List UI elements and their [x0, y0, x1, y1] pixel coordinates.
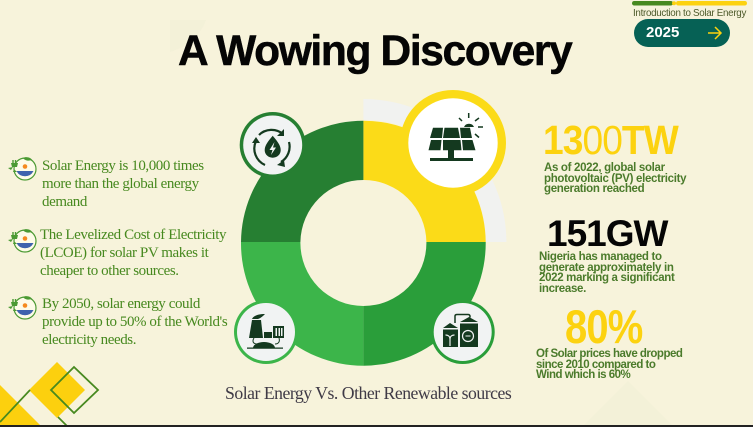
stat text 1: As of 2022, global solar	[544, 162, 665, 174]
fact 3	[42, 296, 228, 348]
fact 2	[40, 227, 226, 279]
stat text 1: photovoltaic (PV) electricity	[544, 173, 686, 185]
bottom edge	[0, 425, 753, 427]
stat text 3	[536, 348, 682, 381]
fact 2: (LCOE) for solar PV makes it	[40, 245, 208, 261]
bullet 1	[8, 157, 36, 180]
icon: water cycle	[240, 112, 306, 178]
fact 2: cheaper to other sources.	[40, 263, 179, 279]
title: A Wowing Discovery	[178, 28, 571, 75]
stat text 3: since 2010 compared to	[536, 359, 655, 371]
stat: 151GW: 151GW	[547, 213, 667, 254]
fact 3: provide up to 50% of the World's	[42, 314, 227, 330]
icon: power plant	[234, 300, 298, 364]
year badge	[634, 19, 730, 47]
decorative corner diamonds	[0, 362, 98, 426]
stat text 1	[544, 162, 686, 195]
fact 1: Solar Energy is 10,000 times	[42, 158, 204, 174]
progress bar	[632, 1, 747, 6]
fact 1	[42, 158, 204, 210]
gray background arc	[363, 99, 506, 242]
segment: bio	[363, 242, 486, 366]
stat text 2: 2022 marking a significant	[539, 272, 674, 284]
icon: solar panel	[400, 90, 506, 196]
stat text 2: increase.	[539, 283, 586, 295]
stat text 2: Nigeria has managed to	[539, 251, 662, 263]
subtitle label: Introduction to Solar Energy	[633, 8, 746, 19]
stat text 2: generate approximately in	[539, 262, 674, 274]
stat text 3: Of Solar prices have dropped	[536, 348, 682, 360]
fact 3: electricity needs.	[42, 332, 136, 348]
stat: 80%: 80%	[565, 300, 642, 353]
chart caption: Solar Energy Vs. Other Renewable sources	[225, 383, 511, 403]
stat text 1: generation reached	[544, 183, 644, 195]
year badge: 2025	[646, 24, 679, 41]
stat text 2	[539, 251, 675, 295]
stat text 3: Wind which is 60%	[536, 369, 630, 381]
bullet 3	[8, 296, 36, 319]
segment: solar	[363, 121, 486, 242]
icon: arrow	[708, 26, 722, 40]
icon: biogas	[431, 300, 495, 364]
stat: 1300TW: 1300TW	[543, 117, 678, 163]
fact 3: By 2050, solar energy could	[42, 296, 200, 312]
bullet 2	[8, 229, 36, 252]
segment: hydro	[241, 121, 363, 242]
fact 1: demand	[42, 194, 87, 210]
segment: geothermal	[241, 242, 363, 366]
bullet icons	[8, 157, 37, 320]
fact 2: The Levelized Cost of Electricity	[40, 227, 226, 243]
fact 1: more than the global energy	[42, 176, 199, 192]
